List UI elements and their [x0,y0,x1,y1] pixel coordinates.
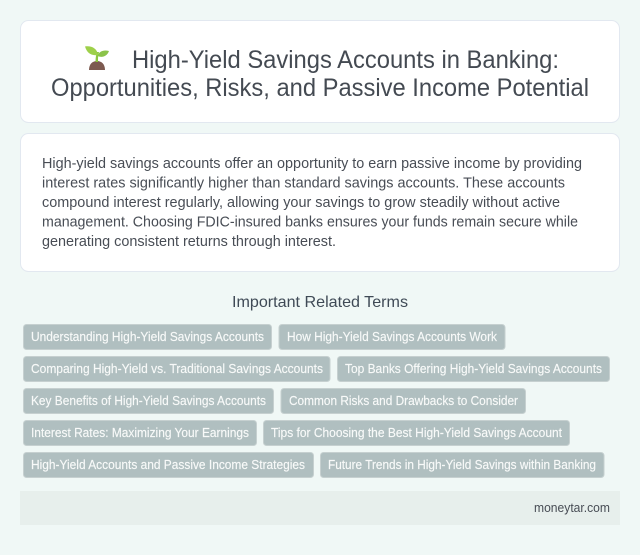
description text: High-yield savings accounts offer an opportunity to earn passive income by providing [42,156,582,172]
tag [24,324,272,350]
tag: Top Banks Offering High-Yield Savings Accounts [345,362,602,376]
header panel [20,20,620,122]
tag [24,452,314,478]
tag [320,452,604,478]
panel: description [20,134,620,272]
description text: interest rates significantly higher than standard savings accounts. These accounts [42,176,565,192]
tag: Understanding High-Yield Savings Accounts [31,330,264,344]
tag: Interest Rates: Maximizing Your Earnings [31,426,249,440]
tag [338,356,610,382]
tag: Tips for Choosing the Best High-Yield Savings Account [271,426,562,440]
tag [24,420,256,446]
tag: Comparing High-Yield vs. Traditional Savings Accounts [31,362,323,376]
title [51,46,589,102]
tag [24,388,274,414]
title: Opportunities, Risks, and Passive Income Potential [51,74,589,102]
tag: High-Yield Accounts and Passive Income Strategies [31,458,305,472]
tag [24,356,330,382]
tag: Common Risks and Drawbacks to Consider [289,394,518,408]
title: High-Yield Savings Accounts in Banking: [132,46,559,74]
description text: generating consistent returns through interest. [42,234,336,250]
tag [281,388,526,414]
footer bar [20,491,620,525]
icon: seedling [85,46,109,70]
footer source: moneytar.com [534,501,610,515]
tag: Key Benefits of High-Yield Savings Accounts [31,394,266,408]
description text [42,156,582,250]
tag [264,420,570,446]
tag [279,324,505,350]
description text: management. Choosing FDIC-insured banks ensures your funds remain secure while [42,214,578,230]
related term tags [24,324,610,478]
tag: Future Trends in High-Yield Savings within Banking [328,458,596,472]
heading: related terms: Important Related Terms [232,294,408,311]
tag: How High-Yield Savings Accounts Work [287,330,498,344]
description text: compound interest regularly, allowing your savings to grow steadily without active [42,195,560,211]
